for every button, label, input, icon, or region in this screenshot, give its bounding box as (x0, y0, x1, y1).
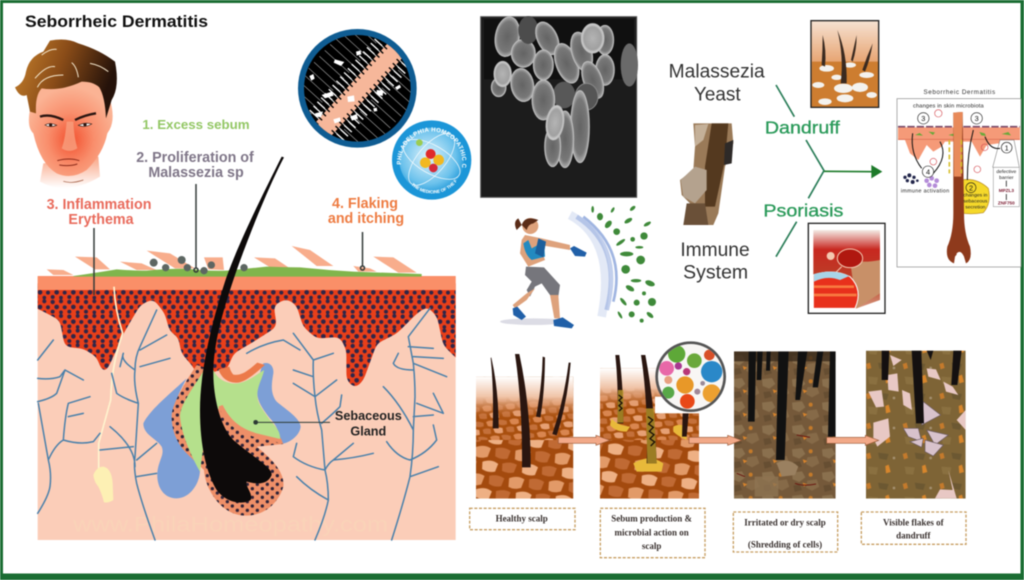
labels: four stages of seborrheic dermatitis (47, 117, 404, 228)
skin cross-section diagram (38, 157, 456, 540)
label: System: System (683, 262, 748, 283)
marker numbers: 4 (926, 167, 930, 176)
icon: Philadelphia Homeopathic Clinic logo: PHILADELPHIA HOMEOPATHIC CLINIC (396, 126, 468, 168)
icon: scalp close-up circle (297, 28, 418, 148)
stage pointer lines (94, 184, 364, 295)
converging arrow (776, 85, 882, 257)
icon: woman punching with shield against germs (500, 205, 656, 328)
scalp stages strip (470, 341, 966, 558)
photo: psoriasis skin (808, 223, 885, 313)
label: excess sebum: 1. Excess sebum (142, 117, 250, 132)
defective barrier box (993, 140, 1019, 207)
stage 4 image: visible flakes (866, 351, 966, 499)
defective barrier box: defective (996, 169, 1017, 175)
icon: inflamed face with brown hair (15, 39, 117, 188)
defective barrier box: ZNF750 (998, 201, 1015, 206)
sebaceous gland pointer and label: Gland (350, 424, 386, 438)
title of mini diagram: Seborrheic Dermatitis (923, 89, 995, 96)
mini diagram: seborrheic dermatitis pathogenesis (897, 89, 1021, 267)
woman figure (500, 218, 587, 328)
label: Yeast: Yeast (694, 85, 741, 106)
label: flaking and itching: 4. Flaking (332, 196, 398, 212)
label: inflammation erythema: 3. Inflammation (47, 197, 151, 213)
sebaceous gland pointer and label: Sebaceous (335, 409, 402, 423)
caption: irritated or dry scalp (733, 512, 838, 552)
Psoriasis label: Psoriasis (763, 201, 843, 221)
marker numbers: 3 (975, 114, 979, 123)
microbiota caption: changes in skin microbiota (913, 104, 985, 110)
arrow: healthy to sebum (558, 435, 610, 445)
arrow: sebum to irritated (689, 435, 742, 445)
skin band (898, 127, 1020, 160)
micrograph of malassezia cells (481, 15, 638, 197)
icon: Philadelphia Homeopathic Clinic logo (391, 120, 472, 200)
caption: irritated or dry scalp: (Shredding of cells) (748, 539, 822, 549)
caption: healthy scalp (470, 508, 575, 530)
caption: sebum production: Sebum production & (611, 514, 693, 524)
epidermis red cell layer (38, 283, 456, 393)
caption: irritated or dry scalp: Irritated or dry scalp (744, 517, 826, 527)
blue blood vessels (38, 308, 447, 540)
marker numbers: 2 (969, 183, 973, 192)
arrow: irritated to flakes (827, 435, 879, 445)
blue sweat gland right (257, 363, 301, 444)
marker numbers (921, 114, 1009, 192)
watermark: www.PhilaHomeopathy.com (72, 513, 388, 537)
panel box (897, 99, 1021, 267)
stage 1 image: healthy scalp (476, 354, 573, 499)
grey Malassezia yeast cells (150, 256, 248, 274)
blue sweat gland left (143, 378, 200, 498)
immune cells (903, 173, 919, 184)
icon: Philadelphia Homeopathic Clinic logo: THE MEDICINE OF THE FUTURE (412, 178, 457, 194)
marker numbers: 3 (921, 114, 925, 123)
dandruff versus psoriasis flow diagram (669, 21, 885, 313)
microbes magnifier circle (655, 341, 726, 412)
label: proliferation of malassezia: 2. Proliferation of (136, 150, 254, 166)
defective barrier box: barrier (999, 175, 1014, 181)
photo: fungus on bark (680, 123, 733, 225)
sheath band in gland (218, 405, 282, 443)
label: flaking and itching: and itching (328, 211, 404, 227)
stage 3 image: irritated scalp (734, 351, 836, 499)
nerve fibre (93, 287, 123, 503)
Dandruff label: Dandruff (765, 117, 841, 137)
dermal pocket strip (218, 363, 265, 383)
defective barrier box: MPZL3 (999, 188, 1014, 193)
sebaceous gland yellow (958, 178, 989, 214)
label: Immune: Immune (680, 240, 750, 261)
hair shaft (947, 112, 971, 263)
marker numbers: 1 (1005, 143, 1009, 152)
sebaceous caption: secretion (965, 205, 986, 211)
orange horny layer band (38, 276, 456, 290)
stage 2 image: sebum and microbial action (600, 355, 699, 499)
caption: sebum production: microbial action on (615, 528, 689, 538)
follicle sheath with cells (172, 365, 283, 516)
caption: sebum production: scalp (642, 541, 661, 551)
caption: sebum production (600, 508, 705, 558)
sebaceous caption: changes in (963, 193, 987, 199)
hair follicle and shaft (200, 157, 284, 503)
sebaceous caption: sebaceous (963, 199, 988, 205)
sebaceous gland (180, 370, 280, 472)
label: proliferation of malassezia: Malassezia sp (148, 165, 244, 181)
caption: healthy scalp: Healthy scalp (496, 514, 548, 524)
caption: visible flakes (861, 512, 966, 544)
label: Malassezia: Malassezia (669, 61, 765, 82)
immune activation caption: immune activation (901, 188, 949, 194)
caption: visible flakes: dandruff (896, 531, 932, 541)
surface flakes and green sebum film (47, 246, 422, 277)
dermis (38, 277, 456, 540)
numbered markers and black arrows (912, 110, 1012, 193)
label: inflammation erythema: Erythema (68, 212, 135, 228)
title: Seborrheic Dermatitis (25, 12, 208, 31)
photo: dandruff scalp (811, 21, 879, 107)
sebaceous gland pointer and label (253, 409, 402, 438)
caption: visible flakes: Visible flakes of (883, 517, 945, 527)
shield arcs (570, 215, 616, 317)
green germs (591, 205, 656, 323)
